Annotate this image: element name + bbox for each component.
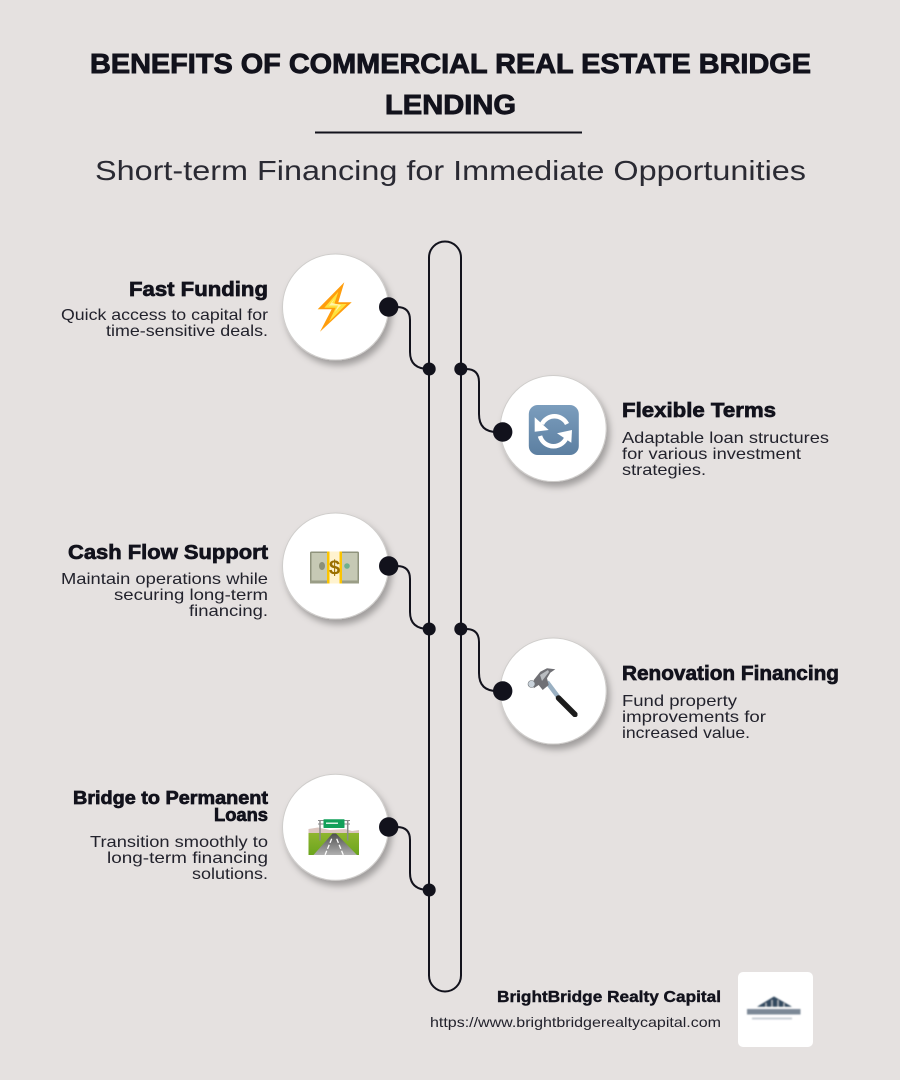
label: improvements for	[622, 709, 767, 726]
label: Quick access to capital for	[61, 307, 269, 324]
label: long-term financing	[107, 850, 268, 867]
label: Transition smoothly to	[90, 834, 268, 851]
icon circle: motorway	[282, 774, 388, 880]
label	[73, 788, 268, 883]
label	[61, 279, 269, 340]
connector	[454, 622, 512, 701]
label: solutions.	[192, 866, 268, 883]
connector	[379, 297, 436, 376]
icon circle: lightning bolt	[282, 254, 388, 360]
label: Flexible Terms	[622, 400, 776, 422]
footer: brand name: BrightBridge Realty Capital	[497, 989, 721, 1006]
label: Adaptable loan structures	[622, 430, 829, 447]
label: Loans	[214, 805, 268, 825]
item: bridge to permanent loans	[73, 774, 436, 896]
label: securing long-term	[114, 587, 268, 604]
central track	[429, 242, 461, 992]
label	[622, 663, 839, 742]
footer: logo	[738, 972, 813, 1047]
label: increased value.	[622, 725, 750, 742]
connector	[379, 556, 436, 636]
connector	[454, 362, 512, 442]
footer: website url: https://www.brightbridgerealtycapital.com	[430, 1014, 721, 1030]
label: Renovation Financing	[622, 663, 839, 685]
label: strategies.	[622, 462, 706, 479]
icon circle: banknotes	[282, 513, 388, 619]
icon circle: hammer	[500, 638, 606, 744]
label: financing.	[189, 603, 268, 620]
subtitle: Short-term Financing for Immediate Opportunities	[95, 155, 806, 186]
item: flexible terms	[454, 362, 829, 482]
item: renovation financing	[454, 622, 839, 744]
label: Cash Flow Support	[68, 542, 268, 564]
connector	[379, 817, 436, 896]
label: for various investment	[622, 446, 802, 463]
label	[61, 542, 268, 620]
title: BENEFITS OF COMMERCIAL REAL ESTATE BRIDGE	[90, 48, 811, 79]
label	[622, 400, 829, 479]
label: Bridge to Permanent	[73, 788, 268, 808]
title: LENDING	[385, 89, 516, 120]
label: time-sensitive deals.	[106, 323, 268, 340]
title	[90, 48, 811, 120]
label: Fund property	[622, 693, 737, 710]
label: Fast Funding	[129, 279, 268, 301]
label: Maintain operations while	[61, 571, 268, 588]
icon circle: banknotes: $	[329, 558, 340, 580]
item: fast funding	[61, 254, 436, 376]
icon circle: refresh arrows	[500, 376, 606, 482]
item: cash flow support	[61, 513, 436, 636]
